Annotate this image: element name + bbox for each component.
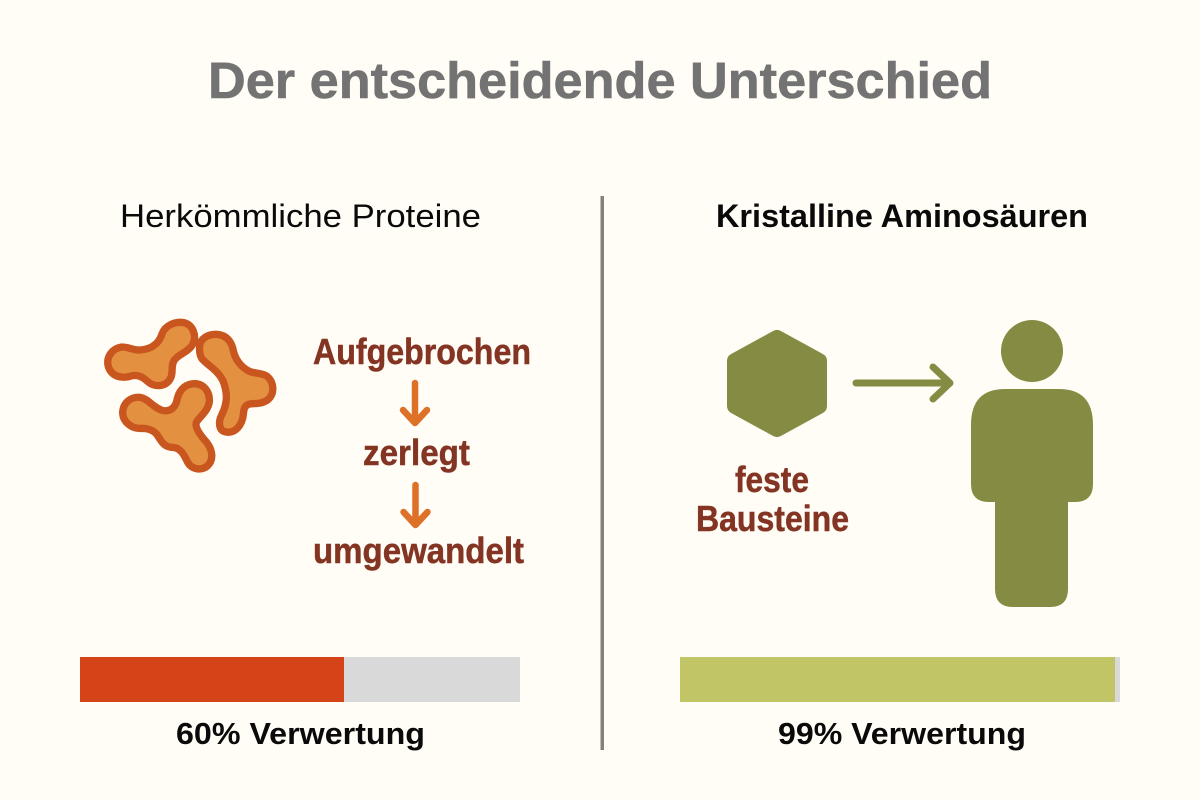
arrow: down to zerlegt xyxy=(403,383,427,423)
process label: Aufgebrochen: Aufgebrochen xyxy=(313,331,531,372)
heading: conventional proteins: Herkömmliche Proteine xyxy=(120,198,481,234)
arrow: block to body xyxy=(856,367,950,399)
icon: protein clusters xyxy=(108,322,273,469)
progress bar: 99 percent xyxy=(680,657,1120,702)
label: feste Bausteine: feste xyxy=(735,459,809,500)
arrow: down to umgewandelt xyxy=(404,485,428,525)
label: feste Bausteine: Bausteine xyxy=(696,498,849,539)
process label: umgewandelt: umgewandelt xyxy=(313,530,524,571)
label: feste Bausteine xyxy=(696,459,849,539)
process label: zerlegt: zerlegt xyxy=(363,432,470,473)
title: Der entscheidende Unterschied xyxy=(208,52,992,109)
panel: crystalline amino acids xyxy=(680,198,1120,751)
progress bar: 60 percent xyxy=(80,657,520,702)
icon: hexagon building block xyxy=(735,338,819,429)
center divider xyxy=(600,196,604,750)
bar label: 60 percent: 60% Verwertung xyxy=(176,716,425,751)
icon: person xyxy=(971,320,1093,607)
heading: crystalline amino acids: Kristalline Aminosäuren xyxy=(716,198,1088,234)
panel: conventional proteins xyxy=(80,198,531,751)
bar label: 99 percent: 99% Verwertung xyxy=(778,716,1026,751)
